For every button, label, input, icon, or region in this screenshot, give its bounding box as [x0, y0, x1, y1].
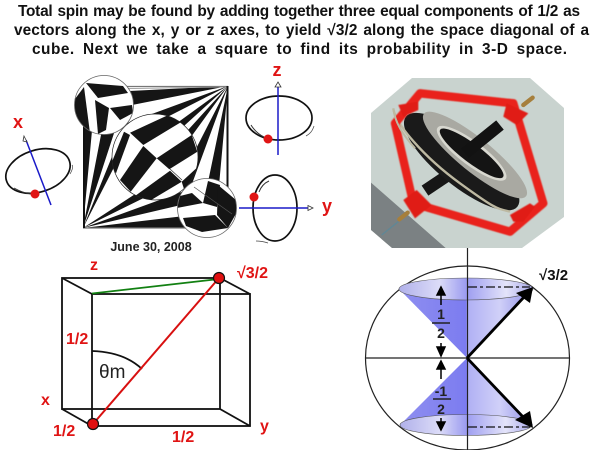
checkered square optical pattern	[72, 75, 238, 238]
fraction minus one half	[433, 383, 451, 417]
lower cone	[400, 358, 533, 436]
red frame	[395, 93, 543, 232]
cube labels: z	[90, 257, 98, 274]
central checker circle	[110, 112, 200, 202]
wire	[382, 222, 398, 235]
ring over frame	[393, 108, 415, 148]
fraction minus one half: -1	[435, 383, 447, 399]
z axis spin diagram	[246, 60, 314, 155]
lower-left ray fan	[83, 86, 228, 228]
theta label: θm	[99, 362, 125, 383]
cube labels: y	[260, 418, 269, 435]
upper-right ray fan	[90, 86, 228, 219]
title	[14, 3, 589, 58]
z axis spin diagram: z	[272, 60, 282, 80]
cube labels: √3/2	[237, 265, 268, 282]
cube diagram	[41, 257, 269, 446]
cube labels: 1/2	[172, 429, 194, 446]
bottom-right circle outline	[178, 178, 236, 238]
cube labels: x	[41, 392, 50, 409]
x axis spin diagram: x	[13, 112, 23, 132]
gyroscope photo	[371, 78, 564, 248]
square edges	[83, 86, 228, 228]
axes	[365, 248, 570, 450]
central circle outline	[112, 114, 198, 200]
fraction one half: 2	[437, 325, 445, 341]
upper cone	[399, 278, 533, 358]
x axis spin diagram	[0, 112, 76, 205]
title: vectors along the x, y or z axes, to yield √3/2 along the space diagonal of a	[14, 22, 589, 39]
bottom-right detail circle	[178, 178, 236, 232]
brass pins	[399, 98, 533, 219]
gyroscope rotor disc	[392, 108, 527, 213]
title: Total spin may be found by adding together three equal components of 1/2 as	[18, 3, 580, 20]
red vertices	[214, 272, 224, 284]
date caption: June 30, 2008	[110, 240, 192, 254]
top-left circle outline	[74, 76, 134, 134]
photo shadow corner	[371, 183, 446, 248]
spin vectors	[467, 287, 533, 428]
y axis spin diagram	[239, 175, 332, 243]
cube labels: 1/2	[66, 331, 88, 348]
fraction minus one half: 2	[437, 401, 445, 417]
small vertical arrows	[437, 287, 445, 430]
frame joints	[398, 102, 535, 222]
upper axle	[465, 125, 500, 153]
sphere and spin cones diagram	[365, 248, 570, 450]
green face diagonal	[92, 279, 219, 294]
dashed radii	[468, 287, 530, 427]
cube labels: 1/2	[53, 423, 75, 440]
title: cube. Next we take a square to find its probability in 3-D space.	[32, 41, 567, 58]
fraction one half: 1	[437, 306, 445, 322]
cube labels	[41, 257, 269, 446]
lower axle	[425, 175, 448, 191]
top-left detail circle	[74, 83, 134, 134]
y axis spin diagram: y	[322, 196, 332, 216]
sphere label: √3/2	[539, 267, 568, 284]
fraction one half	[432, 306, 450, 341]
red space diagonal	[93, 278, 219, 424]
